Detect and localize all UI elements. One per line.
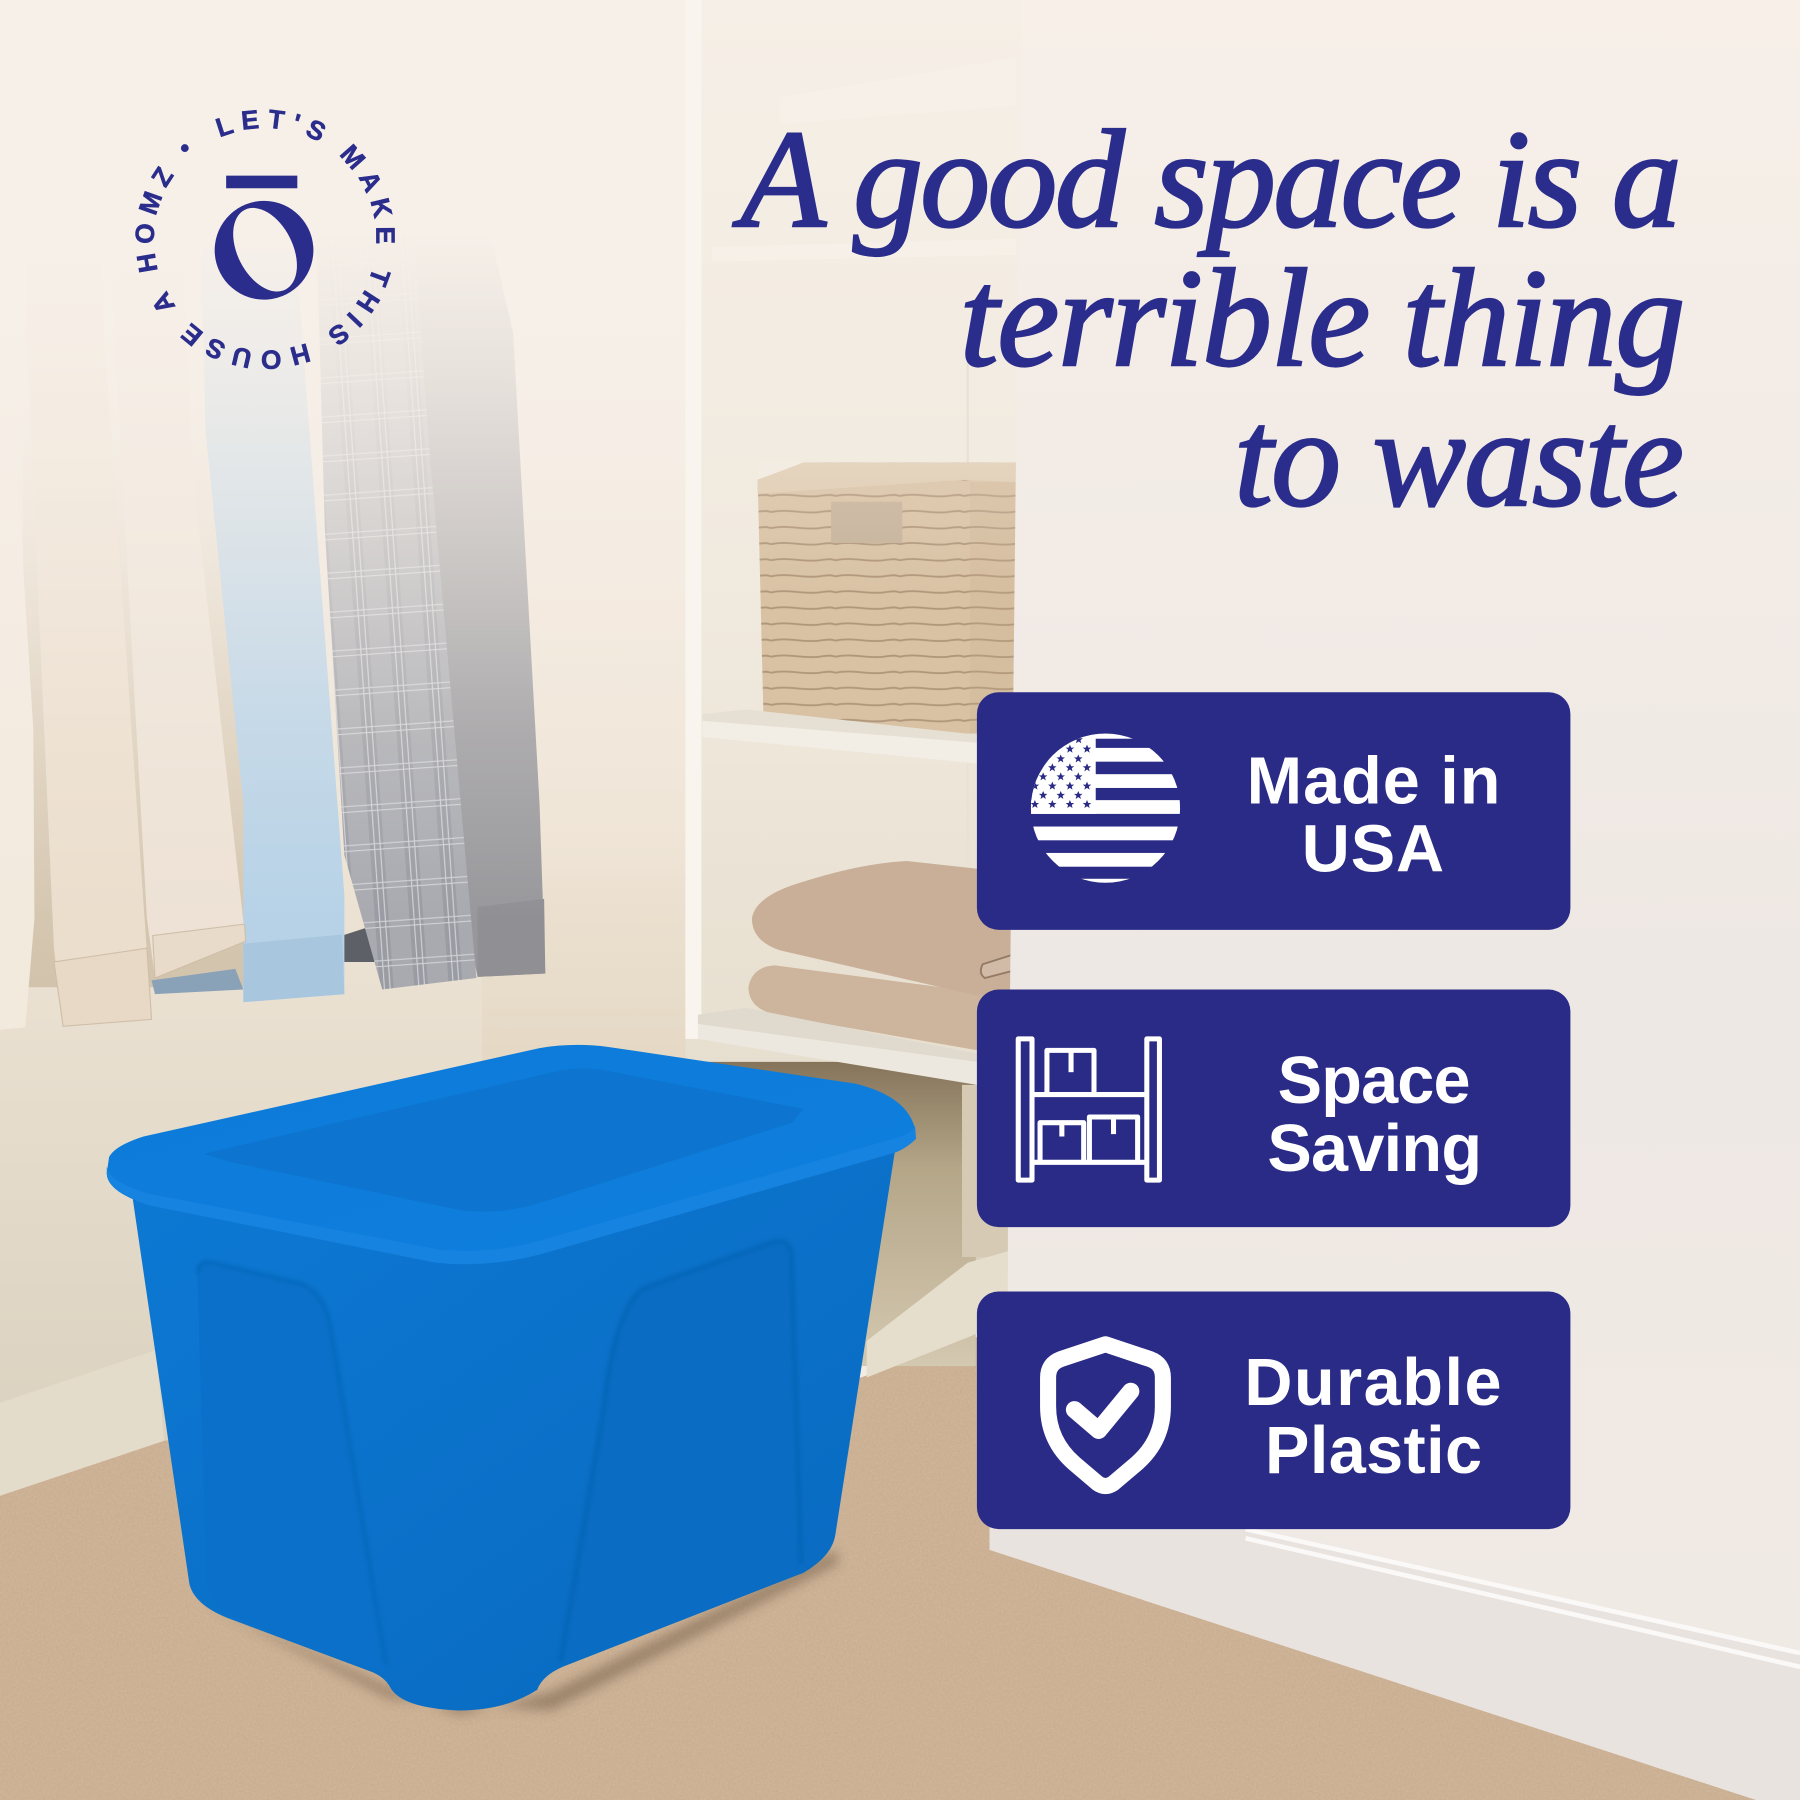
cream cuff bbox=[153, 924, 246, 978]
label: made in USA bbox=[1247, 745, 1500, 886]
title: to waste bbox=[1234, 381, 1684, 536]
shadow behind coats bbox=[23, 402, 253, 987]
cream long coat bbox=[103, 0, 246, 978]
plaid shirt bbox=[310, 0, 476, 990]
denim cuff bbox=[243, 934, 344, 1002]
label: made in USA: Made in bbox=[1247, 745, 1500, 819]
denim underlayer bbox=[152, 969, 243, 994]
logo badge bbox=[135, 109, 395, 370]
top shelf bbox=[703, 709, 977, 763]
top towel bbox=[752, 861, 1011, 995]
icon: US flag bbox=[1031, 734, 1180, 883]
basket side shade bbox=[970, 482, 1016, 735]
shelf side panel bbox=[685, 0, 701, 1039]
right wall bbox=[990, 0, 1800, 1800]
tote right recess edge bbox=[560, 1241, 801, 1662]
sweater cuff bbox=[478, 899, 545, 977]
feature card: durable plastic bbox=[977, 1291, 1570, 1529]
feature card: made in USA bbox=[977, 692, 1570, 930]
slogan dot bbox=[181, 144, 189, 152]
label: durable plastic: Durable bbox=[1244, 1346, 1502, 1420]
right baseboard behind box bbox=[867, 1251, 1008, 1378]
lid lip highlight bbox=[107, 1125, 916, 1264]
label: space saving: Space bbox=[1278, 1044, 1471, 1118]
tote body bbox=[132, 1148, 895, 1710]
basket top fade bbox=[758, 463, 1016, 600]
white knit bbox=[0, 0, 34, 1030]
title: A good space is a bbox=[732, 102, 1682, 257]
lid inner plate bbox=[204, 1068, 804, 1212]
floor carpet bbox=[0, 1337, 1756, 1800]
tote left recess edge bbox=[197, 1262, 386, 1665]
dark shadow under shirts bbox=[342, 922, 385, 962]
towels bbox=[748, 861, 1011, 1050]
grey sweater bbox=[344, 0, 545, 977]
basket bbox=[758, 463, 1016, 735]
under shelf dark recess bbox=[700, 1062, 976, 1366]
garments bbox=[0, 0, 545, 1030]
faint upper shelf bbox=[712, 239, 1016, 262]
icon: shield with check bbox=[1048, 1344, 1163, 1486]
tote lid bbox=[107, 1045, 915, 1264]
lower cabinet panel bbox=[962, 1085, 1010, 1257]
towel fold bbox=[981, 955, 1011, 978]
box shadow bbox=[201, 1550, 838, 1715]
icon: storage shelf bbox=[1018, 1039, 1159, 1180]
logo ring bbox=[198, 184, 330, 317]
circular slogan: LET'S MAKE THIS HOUSE A HOMZ bbox=[135, 109, 395, 370]
label: made in USA: USA bbox=[1302, 812, 1444, 886]
tote left recess bbox=[197, 1262, 386, 1674]
overhead fade overlay bbox=[0, 0, 689, 918]
feature card: space saving bbox=[977, 990, 1570, 1227]
basket handle hole bbox=[831, 502, 902, 543]
lower shelf bbox=[698, 1008, 977, 1085]
label: space saving bbox=[1267, 1044, 1482, 1186]
shelf unit interior bbox=[685, 0, 1030, 1274]
beige cuff bbox=[54, 948, 152, 1026]
basket rim bbox=[758, 463, 1016, 494]
shelf back panel seam bbox=[967, 344, 969, 1056]
blue denim shirt bbox=[195, 0, 344, 1002]
blue storage tote bbox=[107, 1045, 916, 1710]
tote right recess bbox=[560, 1241, 801, 1662]
label: space saving: Saving bbox=[1267, 1112, 1482, 1186]
faint folded linen bbox=[781, 57, 1016, 124]
right baseboard bbox=[990, 1472, 1800, 1800]
logo bar bbox=[226, 176, 297, 188]
beige coat bbox=[23, 0, 152, 1026]
label: durable plastic bbox=[1244, 1346, 1502, 1488]
alcove wall bbox=[482, 0, 695, 1263]
title bbox=[732, 102, 1685, 536]
bottom towel bbox=[748, 965, 1011, 1050]
left wall bbox=[0, 0, 488, 1515]
label: durable plastic: Plastic bbox=[1265, 1414, 1482, 1488]
left baseboard bbox=[0, 1350, 164, 1496]
title: terrible thing bbox=[960, 241, 1685, 396]
